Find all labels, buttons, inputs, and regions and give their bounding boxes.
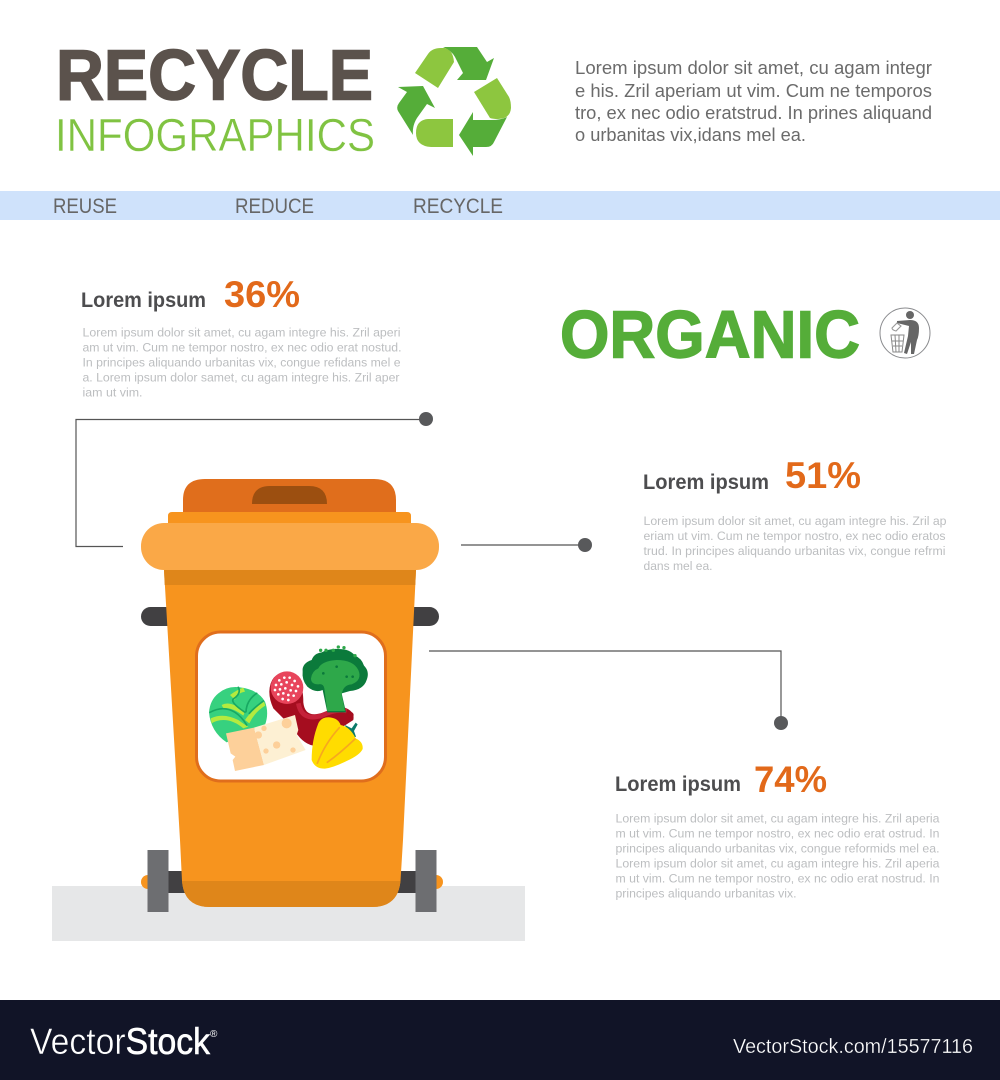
- icon: cheese: [226, 715, 306, 771]
- navigation band: [0, 191, 1000, 220]
- icon: cabbage: [209, 687, 267, 742]
- block: 74%: 74%: [754, 759, 827, 800]
- footer: VectorStock: [30, 1021, 210, 1062]
- block: 36%: [81, 274, 402, 400]
- intro text: o urbanitas vix,idans mel ea.: [575, 125, 806, 145]
- icon: salami: [269, 671, 354, 746]
- block: 36%: a. Lorem ipsum dolor samet, cu agam integre his. Zril aper: [82, 370, 400, 384]
- block: 74%: [615, 759, 940, 900]
- food illustration: [209, 645, 368, 771]
- block: 36%: iam ut vim.: [82, 386, 142, 400]
- block: 36%: Lorem ipsum: [81, 289, 206, 312]
- footer: VectorStock.com/15577116: [733, 1036, 973, 1058]
- block: 36%: In principes aliquando urbanitas vix, congue refidans mel e: [82, 356, 401, 370]
- block: 74%: m ut vim. Cum ne tempor nostro, ex nec odio erat ostrud. In: [616, 826, 940, 840]
- block: 51%: Lorem ipsum: [643, 471, 769, 494]
- title: INFOGRAPHICS: [55, 109, 375, 161]
- bin rim: [141, 523, 439, 570]
- icon: yellow pepper: [312, 717, 363, 769]
- navigation band: REDUCE: [235, 195, 314, 218]
- footer: [0, 1000, 1000, 1080]
- ground: [52, 886, 525, 941]
- title: RECYCLE: [56, 36, 373, 116]
- label: organic waste: [196, 632, 386, 781]
- block: 51%: dans mel ea.: [644, 559, 712, 573]
- block: 74%: Lorem ipsum: [615, 773, 741, 796]
- block: 51%: [643, 455, 947, 573]
- icon: recycle symbol: [397, 47, 511, 156]
- bin lid: [168, 479, 411, 524]
- footer: ®: [210, 1029, 218, 1040]
- block: 36%: 36%: [224, 274, 300, 315]
- intro text: [575, 58, 932, 145]
- block: 51%: Lorem ipsum dolor sit amet, cu agam integre his. Zril ap: [644, 514, 947, 528]
- icon: tidy man in circle: [880, 308, 930, 358]
- side handles: [141, 607, 439, 626]
- bin body: [164, 570, 416, 907]
- intro text: tro, ex nec odio eratstrud. In prines aliquand: [575, 103, 932, 123]
- connector: top: [76, 412, 433, 546]
- icon: broccoli: [303, 645, 368, 712]
- block: 74%: Lorem ipsum dolor sit amet, cu agam integre his. Zril aperia: [616, 812, 940, 826]
- block: 74%: m ut vim. Cum ne tempor nostro, ex nc odio erat nostrud. In: [616, 872, 940, 886]
- block: 74%: principes aliquando urbanitas vix, congue reformids mel ea.: [616, 842, 940, 856]
- block: 74%: Lorem ipsum dolor sit amet, cu agam integre his. Zril aperia: [616, 856, 940, 870]
- block: 74%: principes aliquando urbanitas vix.: [616, 886, 796, 900]
- block: 51%: trud. In principes aliquando urbanitas vix, congue refrmi: [644, 544, 946, 558]
- navigation band: REUSE: [53, 195, 117, 218]
- connector: middle: [461, 538, 592, 552]
- connector: lower: [429, 651, 788, 730]
- navigation band: RECYCLE: [413, 195, 503, 218]
- title: [55, 36, 375, 161]
- intro text: e his. Zril aperiam ut vim. Cum ne temporos: [575, 81, 932, 101]
- wheels: [141, 850, 443, 912]
- heading: organic: ORGANIC: [560, 298, 860, 372]
- block: 36%: am ut vim. Cum ne tempor nostro, ex nec odio erat nostud.: [82, 340, 402, 354]
- block: 51%: eriam ut vim. Cum ne tempor nostro, ex nec odio eratos: [644, 529, 946, 543]
- block: 36%: Lorem ipsum dolor sit amet, cu agam integre his. Zril aperi: [82, 326, 400, 340]
- intro text: Lorem ipsum dolor sit amet, cu agam integr: [575, 58, 932, 78]
- block: 51%: 51%: [785, 455, 861, 496]
